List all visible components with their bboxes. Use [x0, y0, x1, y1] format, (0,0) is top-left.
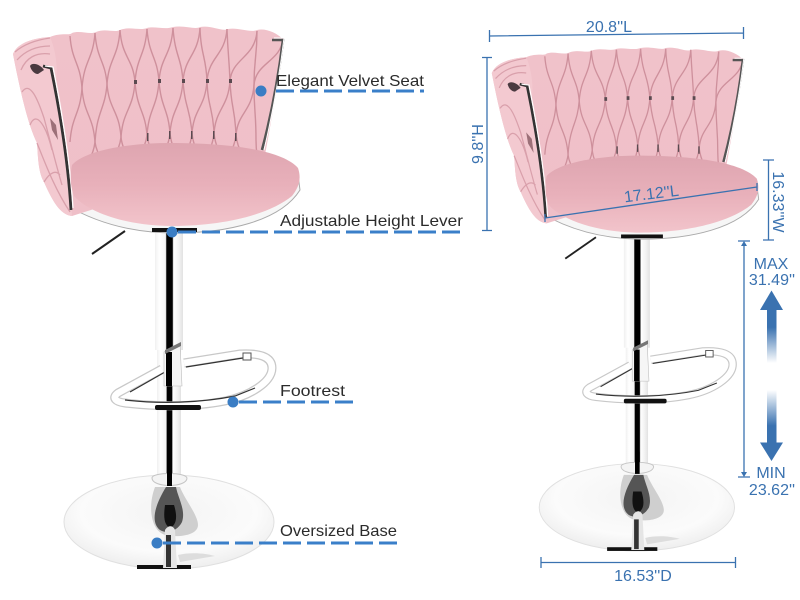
right stool photo — [492, 48, 759, 551]
label: max height: MAX — [754, 256, 789, 273]
label: min height — [749, 465, 795, 499]
arrow: down — [760, 390, 783, 461]
callout: Adjustable Height Lever: Adjustable Height Lever — [280, 213, 464, 230]
dimension: base diameter 16.53 D — [541, 557, 736, 585]
callout: Oversized Base: Oversized Base — [280, 523, 397, 540]
dimension: seat width 16.33 W — [763, 160, 786, 240]
dimension: seat length 17.12 L: 17.12''L — [623, 183, 680, 206]
dimension: back height 9.8 H: 9.8''H — [470, 124, 487, 164]
label: max height — [749, 256, 795, 289]
callout: Adjustable Height Lever — [166, 213, 464, 238]
callout: Elegant Velvet Seat — [256, 73, 425, 96]
dimension: base diameter 16.53 D: 16.53''D — [614, 568, 672, 585]
dimension: back height 9.8 H — [470, 58, 492, 230]
label: min height: MIN — [756, 465, 786, 482]
dimension: back width 20.8 L: 20.8''L — [586, 19, 632, 36]
label: max height: 31.49'' — [749, 272, 795, 289]
dimension: seat length 17.12 L — [545, 183, 757, 222]
dimension: back width 20.8 L — [490, 19, 744, 42]
label: min height: 23.62'' — [749, 482, 795, 499]
callout: Footrest — [228, 383, 358, 408]
dimension: seat width 16.33 W: 16.33''W — [769, 171, 786, 234]
callout: Elegant Velvet Seat: Elegant Velvet Seat — [276, 73, 425, 90]
callout: Oversized Base — [152, 523, 397, 548]
arrow: up — [760, 290, 783, 363]
dimension: height range line — [738, 241, 750, 477]
left stool photo — [13, 27, 300, 569]
callout: Footrest: Footrest — [280, 383, 346, 400]
